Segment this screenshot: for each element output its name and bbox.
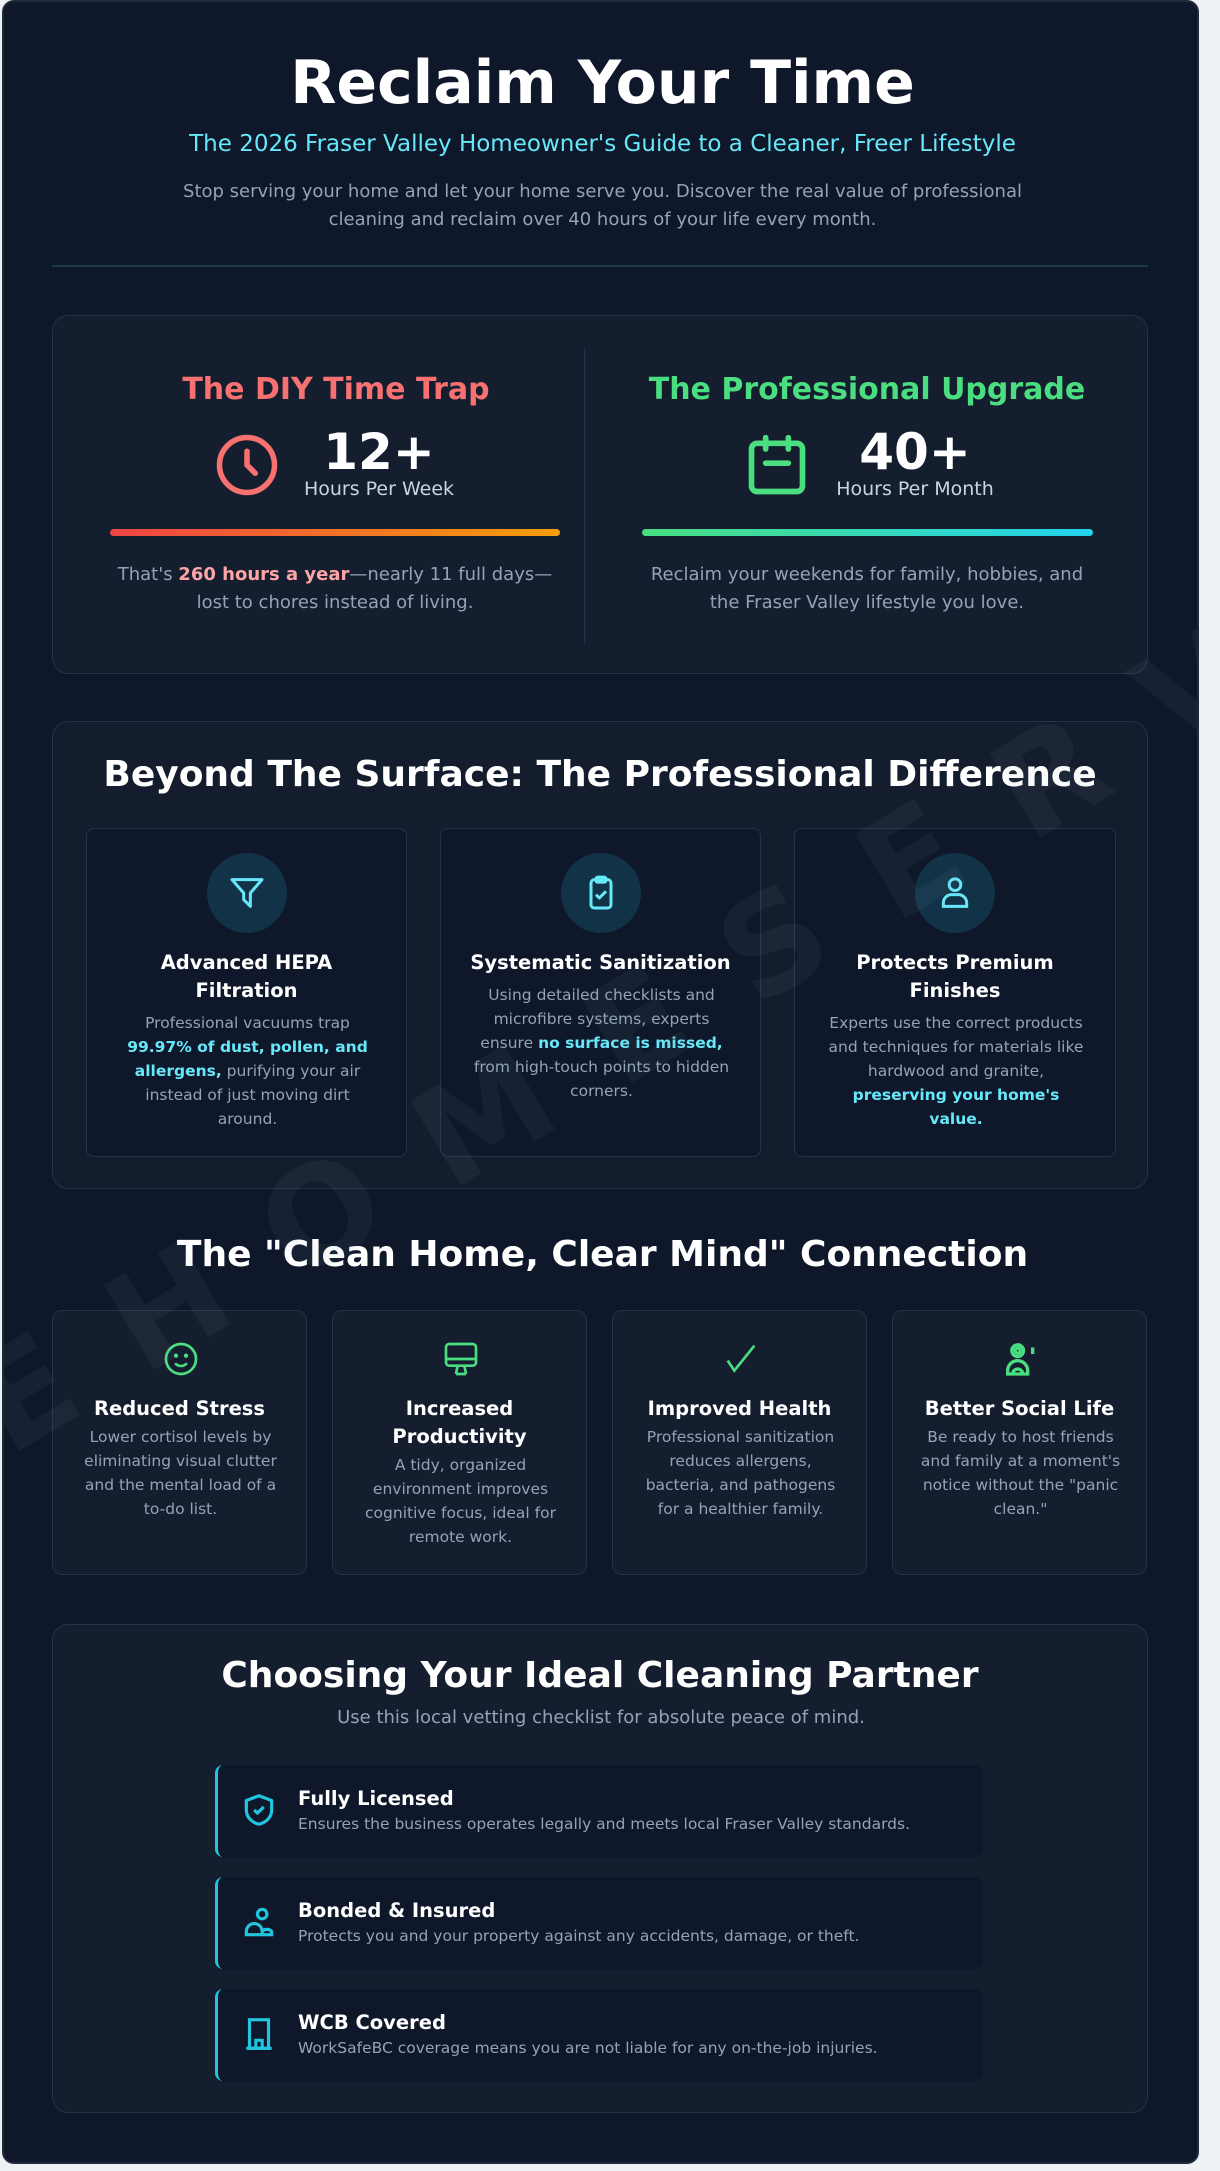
card: sanitization: ensure no surface is missed, xyxy=(480,1034,723,1052)
left: DIY time trap xyxy=(110,372,560,613)
right: professional upgrade: Hours Per Month xyxy=(836,478,994,500)
stat 40+: 40+ xyxy=(859,423,971,481)
icon: calendar xyxy=(748,434,806,494)
card: finishes: value. xyxy=(929,1110,983,1128)
card: sanitization: from high-touch points to hidden xyxy=(474,1058,729,1076)
text: That's 260 hours a year—nearly 11 full days— xyxy=(118,564,552,585)
text: lost to chores instead of living. xyxy=(197,592,473,613)
item: bonded xyxy=(215,1877,983,1969)
heading: Choosing Your Ideal Cleaning Partner xyxy=(221,1655,979,1696)
card: productivity: environment improves xyxy=(373,1480,548,1498)
card: reduced stress: Lower cortisol levels by xyxy=(90,1428,271,1446)
text: the Fraser Valley lifestyle you love. xyxy=(710,592,1024,613)
card: finishes xyxy=(794,828,1116,1157)
icon: check xyxy=(726,1344,756,1373)
card: finishes: Protects Premium xyxy=(856,951,1054,974)
card: HEPA: Advanced HEPA xyxy=(161,951,332,974)
card: productivity: Increased xyxy=(406,1397,513,1420)
card: reduced stress: and the mental load of a xyxy=(85,1476,276,1494)
card: health: for a healthier family. xyxy=(658,1500,823,1518)
card: finishes: Finishes xyxy=(910,979,1000,1002)
card: social: Better Social Life xyxy=(925,1397,1114,1420)
subtitle: The 2026 Fraser Valley Homeowner's Guide to a Cleaner, Freer Lifestyle xyxy=(189,131,1016,157)
heading: The DIY Time Trap xyxy=(182,372,490,407)
item: licensed: Fully Licensed xyxy=(298,1787,454,1810)
icon: people xyxy=(1006,1343,1034,1376)
card: finishes: Experts use the correct products xyxy=(829,1014,1083,1032)
card: health xyxy=(612,1310,867,1575)
item: bonded: Protects you and your property against any accidents, damage, or theft. xyxy=(298,1927,859,1945)
card: social: Be ready to host friends xyxy=(927,1428,1114,1446)
card: productivity: A tidy, organized xyxy=(395,1456,526,1474)
card: health: reduces allergens, xyxy=(669,1452,812,1470)
left: DIY time trap: Hours Per Week xyxy=(304,478,454,500)
icon: filter xyxy=(206,853,286,933)
subheading: Use this local vetting checklist for absolute peace of mind. xyxy=(337,1707,865,1728)
card: sanitization: microfibre systems, experts xyxy=(494,1010,709,1028)
card: health: Improved Health xyxy=(648,1397,831,1420)
item: bonded: Bonded & Insured xyxy=(298,1899,495,1922)
card: productivity: Productivity xyxy=(392,1425,527,1448)
intro text: Stop serving your home and let your home serve you. Discover the real value of professional cleaning and reclaim over 40 hours of your life every month. xyxy=(183,181,1022,230)
card: HEPA: Filtration xyxy=(195,979,298,1002)
text xyxy=(651,564,1083,613)
icon: person xyxy=(244,1908,274,1936)
panel: time comparison xyxy=(52,315,1148,674)
card: sanitization: Systematic Sanitization xyxy=(470,951,731,974)
card: productivity: cognitive focus, ideal for xyxy=(365,1504,556,1522)
card: health: Professional sanitization xyxy=(647,1428,834,1446)
card: social xyxy=(892,1310,1147,1575)
card: productivity: remote work. xyxy=(409,1528,512,1546)
card: finishes: hardwood and granite, xyxy=(868,1062,1044,1080)
card: HEPA: Professional vacuums trap 99.97% of dust, pollen, and allergens, purifying your air instead of just moving dirt around. xyxy=(127,1014,368,1128)
title: Reclaim Your Time xyxy=(290,48,915,118)
card: sanitization: corners. xyxy=(570,1082,633,1100)
heading: The Professional Upgrade xyxy=(649,372,1085,407)
card: reduced stress: to-do list. xyxy=(144,1500,217,1518)
text xyxy=(118,564,552,613)
heading: clean home clear mind: The "Clean Home, Clear Mind" Connection xyxy=(177,1234,1028,1275)
text: Reclaim your weekends for family, hobbies, and xyxy=(651,564,1083,585)
card: finishes: and techniques for materials like xyxy=(829,1038,1083,1056)
card: social: clean." xyxy=(994,1500,1047,1518)
card: reduced stress: eliminating visual clutter xyxy=(84,1452,277,1470)
card: HEPA xyxy=(86,828,407,1157)
item: WCB: WorkSafeBC coverage means you are not liable for any on-the-job injuries. xyxy=(298,2039,878,2057)
icon: person xyxy=(915,853,995,933)
heading: Beyond The Surface: The Professional Difference xyxy=(103,754,1097,795)
item: licensed xyxy=(215,1765,983,1857)
panel: choosing partner xyxy=(52,1624,1148,2113)
icon: clipboard xyxy=(560,853,640,933)
card: health: bacteria, and pathogens xyxy=(646,1476,835,1494)
card: sanitization: Using detailed checklists and xyxy=(488,986,715,1004)
item: WCB: WCB Covered xyxy=(298,2011,446,2034)
right: professional upgrade xyxy=(642,372,1093,613)
icon: smile xyxy=(164,1342,198,1376)
card: productivity xyxy=(332,1310,587,1575)
card: social: notice without the "panic xyxy=(923,1476,1118,1494)
card: finishes: preserving your home's xyxy=(853,1086,1059,1104)
bar xyxy=(110,529,560,536)
panel: professional difference xyxy=(52,721,1148,1189)
icon: building xyxy=(246,2018,272,2050)
card: sanitization xyxy=(440,828,761,1157)
icon: shield xyxy=(244,1794,274,1826)
card: social: and family at a moment's xyxy=(921,1452,1120,1470)
item: WCB xyxy=(215,1989,983,2081)
stat 12+: 12+ xyxy=(323,423,435,481)
item: licensed: Ensures the business operates legally and meets local Fraser Valley standards. xyxy=(298,1815,910,1833)
icon: monitor xyxy=(444,1342,478,1376)
card: reduced stress xyxy=(52,1310,307,1575)
card: reduced stress: Reduced Stress xyxy=(94,1397,265,1420)
icon: clock xyxy=(216,434,278,496)
bar xyxy=(642,529,1093,536)
